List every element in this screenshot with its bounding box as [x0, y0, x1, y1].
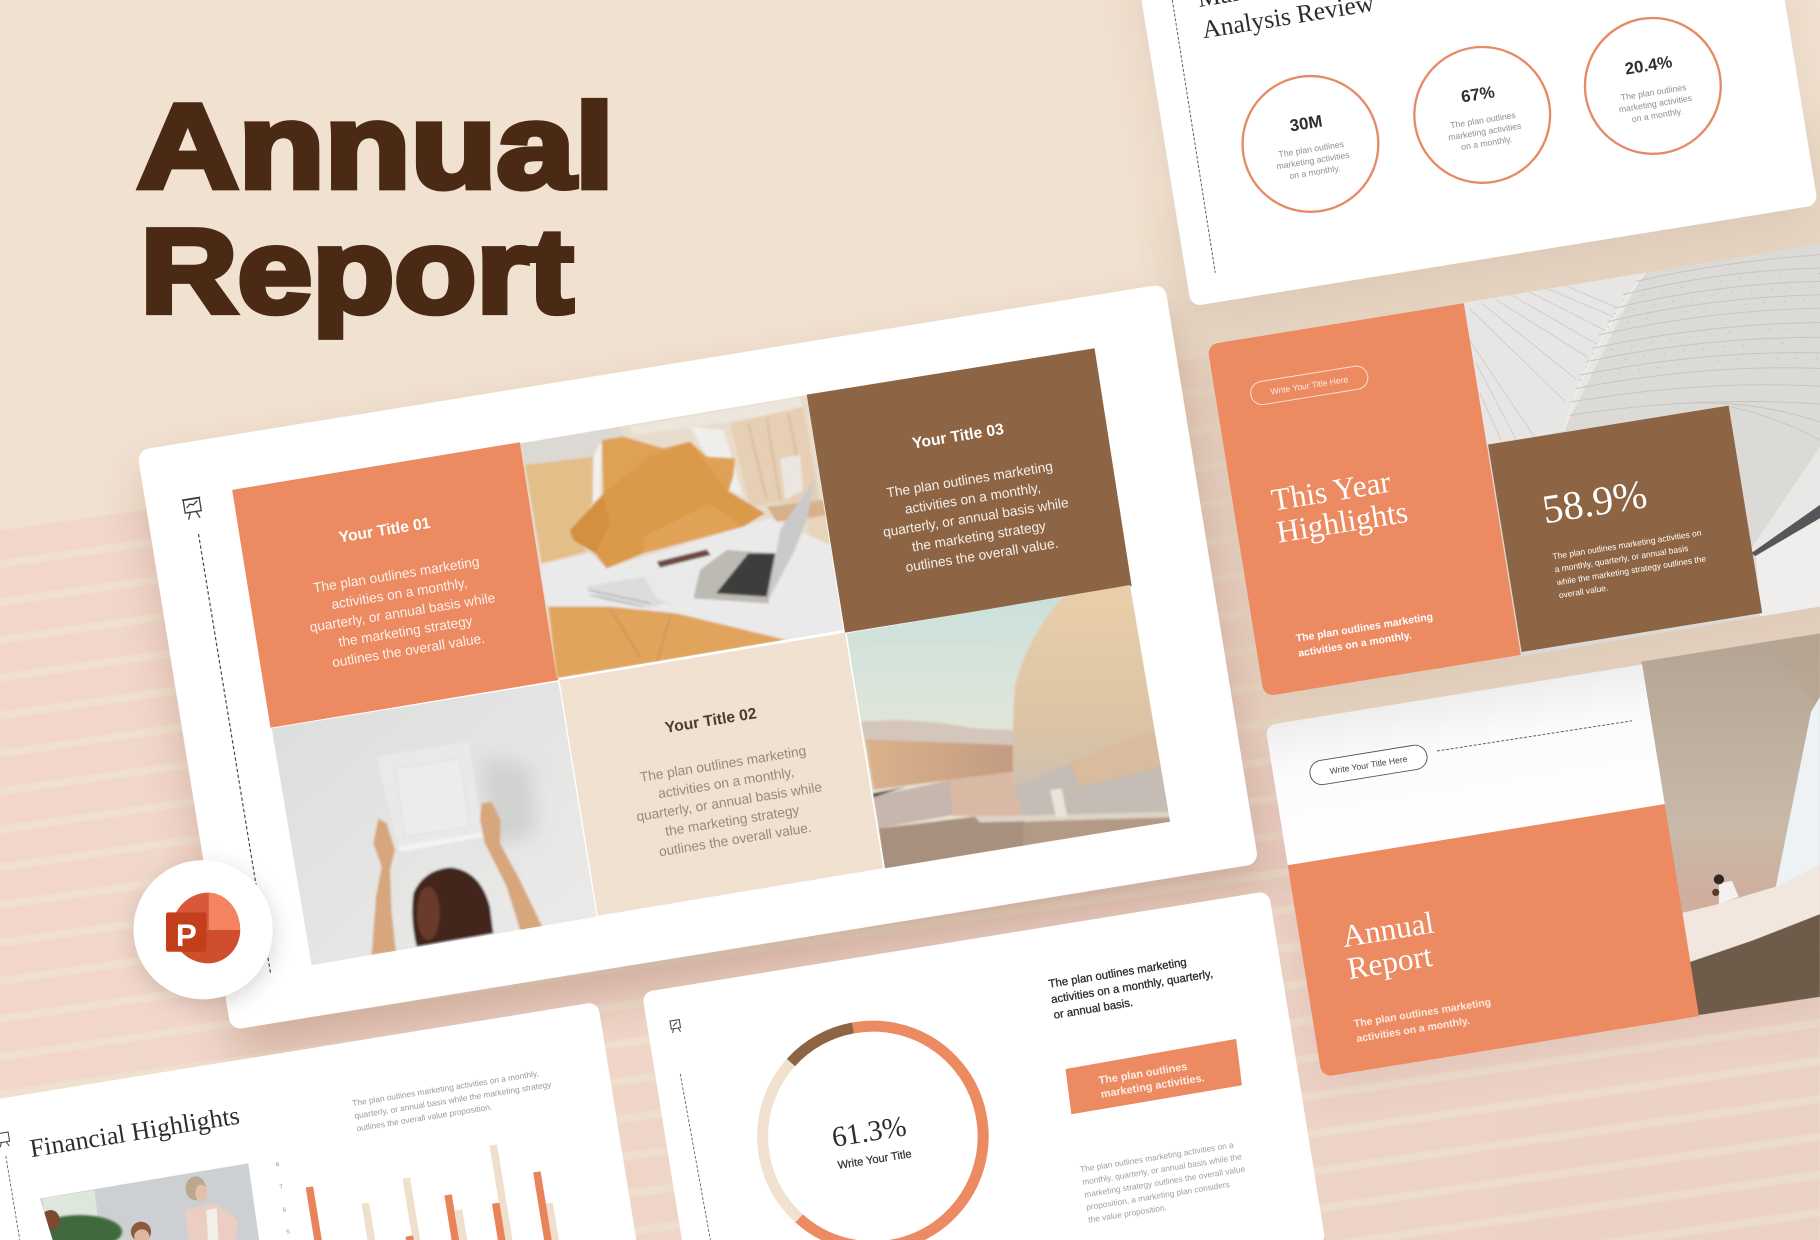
dashed rule — [198, 534, 270, 973]
slide: main six-panel grid — [137, 284, 1259, 1030]
pill label — [1308, 743, 1429, 786]
main title: Report — [140, 205, 573, 338]
panel: your title 02: quarterly, or annual basis while — [635, 779, 823, 824]
stat circle: 30M: marketing activities — [1276, 150, 1351, 171]
stat circle: 67%: on a monthly. — [1460, 134, 1513, 152]
panel: your title 02: Your Title 02 — [664, 705, 758, 737]
panel: your title 01: outlines the overall value. — [331, 631, 486, 670]
heading: Report — [1345, 938, 1435, 986]
panel: your title 01: Your Title 01 — [338, 515, 432, 546]
panel: your title 02: The plan outlines marketing — [639, 743, 807, 785]
panel: your title 02: outlines the overall value. — [658, 820, 813, 859]
panel: your title 02 — [559, 633, 883, 916]
photo: woman holding frame — [270, 680, 603, 970]
panel: your title 03: activities on a monthly, — [904, 480, 1042, 517]
stat circle: 30M: on a monthly. — [1289, 163, 1341, 181]
photo: curved stairwell — [1635, 627, 1820, 1027]
presentation icon — [0, 1132, 10, 1148]
powerpoint badge — [133, 860, 274, 1005]
stat circle: 67% — [1414, 47, 1550, 183]
bold intro text: The plan outlines marketing — [1048, 957, 1188, 991]
main title — [137, 80, 614, 338]
caption: activities on a monthly. — [1298, 631, 1413, 660]
stat description: overall value. — [1558, 582, 1609, 600]
grey paragraph: The plan outlines marketing activities on a — [1079, 1140, 1235, 1174]
brown stat panel — [1488, 406, 1762, 652]
donut ring — [763, 1026, 983, 1240]
panel: your title 03 — [807, 348, 1132, 633]
stat description: The plan outlines marketing activities on — [1552, 527, 1702, 561]
slide: donut chart — [642, 891, 1326, 1240]
panel: your title 03: outlines the overall value. — [904, 535, 1059, 575]
slide: financial highlights — [0, 1002, 655, 1240]
dashed rule — [1172, 0, 1215, 273]
white header panel — [1265, 664, 1665, 865]
heading: Annual — [1340, 905, 1437, 954]
stat circle: 67%: 67% — [1460, 82, 1496, 106]
stat circle: 30M: The plan outlines — [1278, 139, 1345, 159]
panel: your title 02: activities on a monthly, — [657, 764, 795, 801]
description: The plan outlines marketing activities on a monthly, — [352, 1068, 539, 1108]
stat value: 58.9% — [1539, 471, 1650, 532]
photo: white brick architecture — [1462, 244, 1820, 656]
panel: your title 01 — [232, 442, 558, 728]
slide: market analysis review — [1134, 0, 1818, 306]
beige wash over right gutters — [1161, 116, 1820, 754]
icon: powerpoint logo — [166, 893, 240, 963]
stat circle: 67%: The plan outlines — [1449, 110, 1517, 130]
stat circle: 30M: 30M — [1288, 111, 1324, 135]
grey paragraph: the value proposition. — [1088, 1202, 1167, 1225]
stat circle: 20.4% — [1585, 18, 1721, 154]
stat description: a monthly, quarterly, or annual basis — [1554, 543, 1689, 574]
caption: activities on a monthly. — [1356, 1016, 1471, 1045]
bold intro text: activities on a monthly, quarterly, — [1050, 968, 1214, 1006]
slide: annual report cover — [1265, 627, 1820, 1077]
stat description: while the marketing strategy outlines the — [1555, 553, 1707, 587]
caption: The plan outlines marketing — [1353, 997, 1492, 1030]
description: quarterly, or annual basis while the marketing strategy — [354, 1079, 553, 1121]
bar chart: 6 — [283, 1207, 287, 1214]
panel: your title 02: the marketing strategy — [664, 802, 800, 839]
photo: bed with laptop — [520, 395, 844, 678]
description: outlines the overall value proposition. — [356, 1102, 493, 1133]
panel: your title 03: quarterly, or annual basis while — [882, 495, 1070, 540]
stat circle: 20.4%: The plan outlines — [1620, 82, 1688, 102]
pill label: Write Your Title Here — [1329, 754, 1408, 776]
orange callout — [1066, 1039, 1242, 1114]
stat circle: 20.4%: marketing activities — [1618, 93, 1693, 115]
presentation icon — [670, 1020, 681, 1033]
orange panel — [1288, 804, 1699, 1077]
main title: Annual — [137, 80, 614, 213]
donut label: Write Your Title — [837, 1148, 912, 1172]
grey paragraph: marketing strategy outlines the overall value — [1083, 1164, 1246, 1200]
photo: colleagues in office — [40, 1164, 260, 1240]
stat circle: 67%: marketing activities — [1448, 121, 1523, 142]
photo: curved building — [846, 585, 1170, 868]
grey paragraph: proposition, a marketing plan considers — [1085, 1179, 1230, 1212]
panel: your title 03: The plan outlines marketing — [885, 459, 1054, 500]
slide title: Financial Highlights — [28, 1101, 242, 1163]
presentation icon — [182, 497, 204, 520]
panel: your title 01: activities on a monthly, — [330, 575, 468, 612]
pill label — [1249, 364, 1370, 406]
stat circle: 20.4%: on a monthly. — [1631, 106, 1683, 124]
striped background band — [0, 269, 1820, 1240]
caption: The plan outlines marketing — [1295, 612, 1434, 645]
panel: your title 03: Your Title 03 — [911, 421, 1005, 452]
stat circle: 20.4%: 20.4% — [1623, 52, 1674, 79]
orange callout: marketing activities. — [1100, 1072, 1205, 1101]
bar chart: 8 — [276, 1162, 280, 1169]
panel: your title 01: quarterly, or annual basis while — [309, 590, 496, 635]
heading: This Year — [1269, 464, 1394, 518]
bold intro text: or annual basis. — [1053, 997, 1134, 1022]
grey paragraph: monthly, quarterly, or annual basis while the — [1081, 1151, 1243, 1187]
icon: powerpoint logo: P — [176, 918, 197, 953]
panel: your title 03: the marketing strategy — [911, 518, 1047, 555]
pill label: Write Your Title Here — [1270, 374, 1349, 397]
orange panel — [1207, 303, 1521, 696]
panel: your title 01: the marketing strategy — [337, 613, 474, 650]
donut value: 61.3% — [830, 1110, 909, 1154]
slide: this year highlights — [1207, 223, 1820, 696]
bar chart: 5 — [286, 1229, 290, 1236]
panel: your title 01: The plan outlines marketing — [312, 554, 480, 596]
bar chart — [276, 1145, 560, 1240]
heading: Highlights — [1274, 494, 1410, 550]
bar chart: 7 — [279, 1184, 283, 1191]
stat circle: 30M — [1243, 76, 1378, 212]
orange callout: The plan outlines — [1098, 1061, 1188, 1087]
